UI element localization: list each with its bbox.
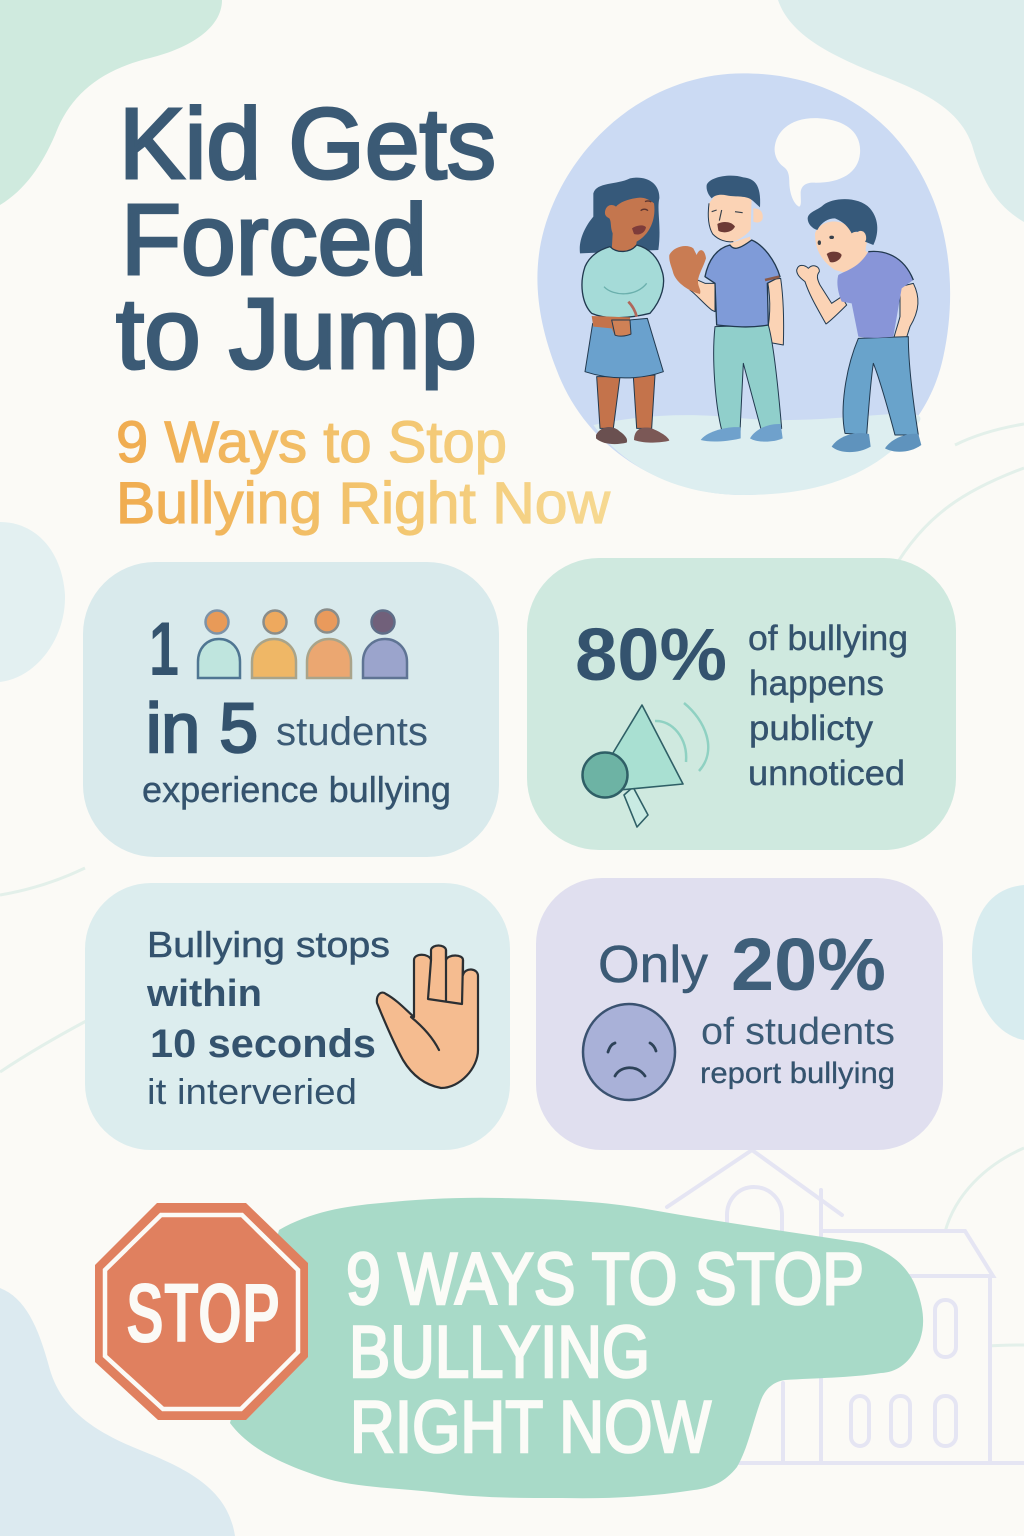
panel: 80% of bullying (527, 558, 956, 850)
icon: sad face (583, 1004, 675, 1100)
label: experience bullying: experience bullying (142, 769, 451, 810)
banner: green blob with call to action (230, 1198, 923, 1498)
speech bubble (775, 118, 860, 207)
banner text: BULLYING (349, 1312, 650, 1393)
banner text: RIGHT NOW (350, 1387, 711, 1468)
label: of students: of students (701, 1011, 895, 1053)
text: of bullying happens publicty unnoticed: happens (749, 664, 884, 703)
panel: stops within 10 seconds (85, 883, 510, 1150)
title (116, 88, 496, 390)
text: only: Only (598, 936, 708, 994)
text: bullying stops within 10 seconds it interveried: 10 seconds (150, 1022, 376, 1066)
school building outline (667, 1150, 1024, 1463)
card background (83, 562, 499, 857)
icon: row of four students (198, 610, 407, 678)
stop sign text: STOP (126, 1266, 280, 1360)
banner text: 9 WAYS TO STOP (346, 1239, 864, 1320)
icon: raised hand (377, 946, 478, 1088)
text: bullying stops within 10 seconds it interveried (146, 924, 390, 1112)
title: to Jump (116, 278, 477, 390)
card background (85, 883, 510, 1150)
illustration: three children talking in a circle (537, 73, 950, 495)
green blob (230, 1198, 923, 1498)
figure: girl (580, 178, 669, 444)
text: of bullying happens publicty unnoticed: of bullying (748, 619, 908, 658)
text: bullying stops within 10 seconds it interveried: it interveried (147, 1071, 357, 1112)
panel: 1 in 5 students (83, 562, 499, 857)
label: report bullying: report bullying (700, 1057, 895, 1090)
text: bullying stops within 10 seconds it interveried: within (146, 973, 262, 1015)
panel: only 20% report (536, 878, 943, 1150)
stat: 20%: 20% (731, 923, 886, 1006)
title: Kid Gets (119, 88, 496, 200)
text: of bullying happens publicty unnoticed: publicty (749, 709, 874, 748)
circle backdrop (537, 73, 950, 495)
subtitle: Bullying Right Now (116, 471, 611, 536)
label: students: students (276, 710, 428, 754)
card background (536, 878, 943, 1150)
icon: megaphone (582, 703, 708, 827)
banner text (346, 1239, 864, 1468)
figure: right boy (797, 199, 921, 452)
stat: 80%: 80% (575, 613, 727, 696)
text: of bullying happens publicty unnoticed (748, 619, 908, 793)
subtitle (116, 410, 611, 536)
title: Forced (121, 184, 427, 296)
subtitle: 9 Ways to Stop (116, 410, 507, 475)
figure: middle boy (669, 176, 784, 442)
icon: stop sign (95, 1203, 308, 1420)
stat: 1: 1 (149, 607, 179, 692)
text: bullying stops within 10 seconds it interveried: Bullying stops (147, 924, 390, 965)
stat: in 5: in 5 (146, 689, 258, 767)
text: of bullying happens publicty unnoticed: unnoticed (748, 754, 905, 793)
ground (593, 413, 920, 495)
card background (527, 558, 956, 850)
